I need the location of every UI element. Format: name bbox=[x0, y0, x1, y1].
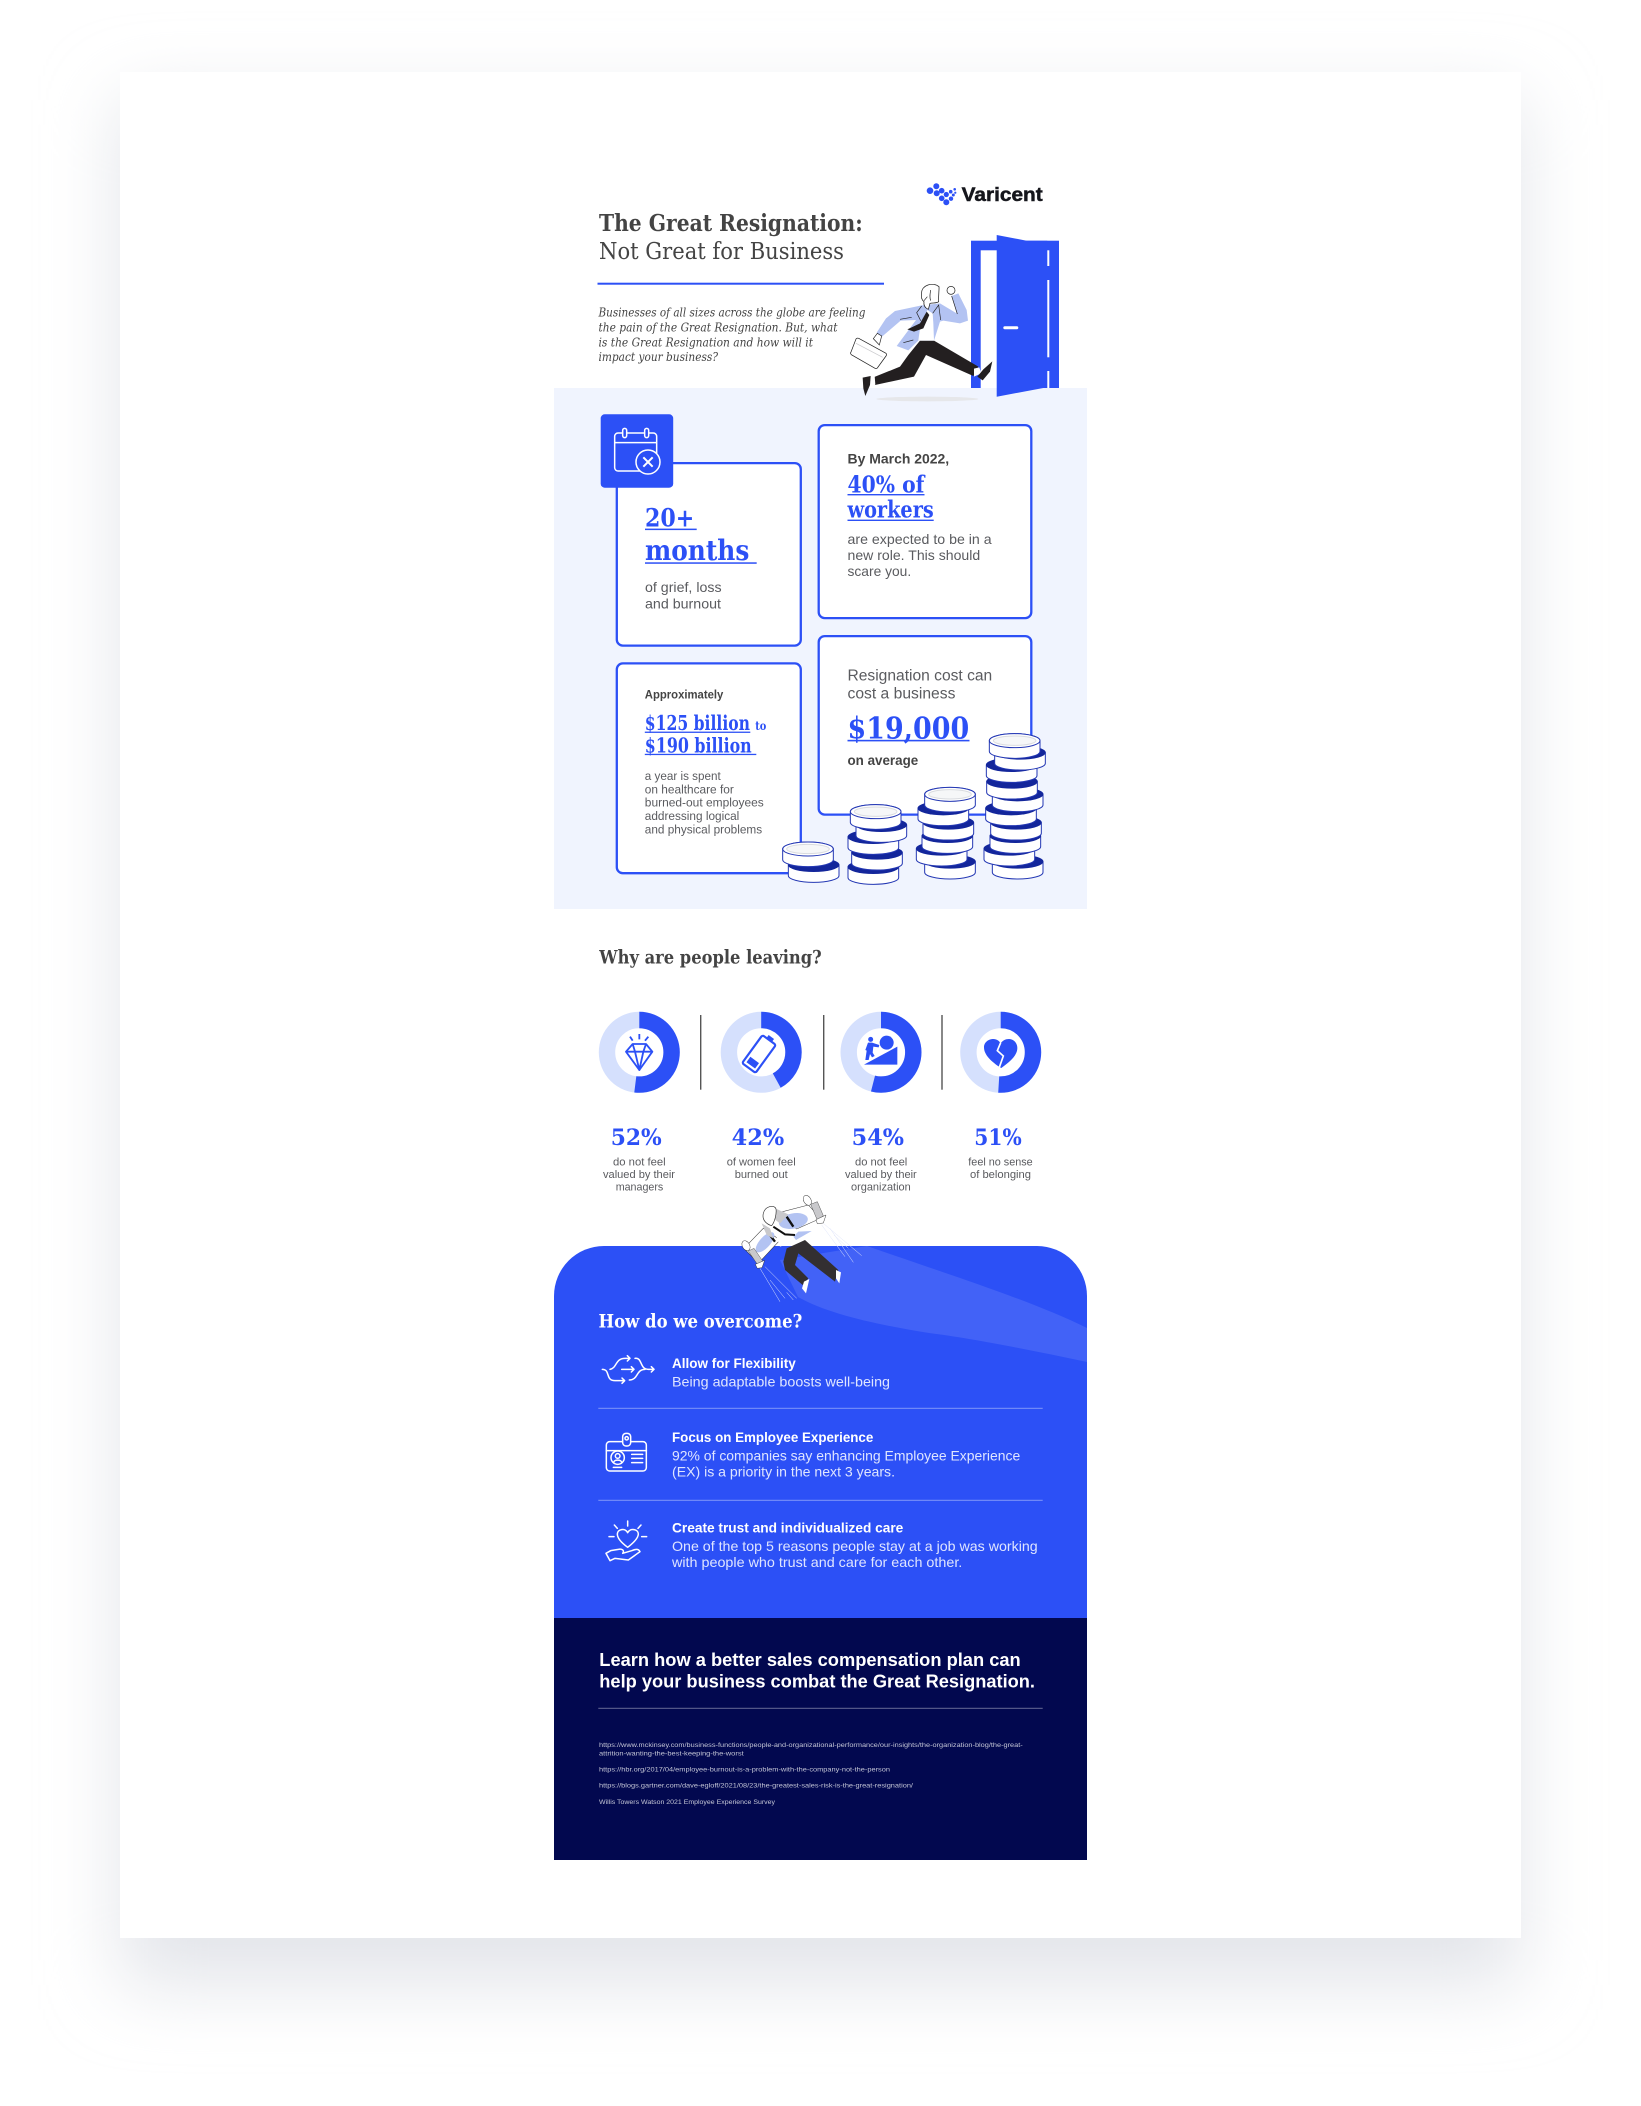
chart: 42 percent donut bbox=[729, 1020, 794, 1085]
panel: card 40% of workers: By March 2022, bbox=[848, 451, 949, 466]
panel: card 20+ months: 20+ bbox=[645, 504, 694, 532]
call to action text: Learn how a better sales compensation plan can bbox=[599, 1650, 1021, 1670]
icon: diamond bbox=[626, 1034, 652, 1070]
stat: 52 percent bbox=[603, 1125, 675, 1194]
panel: card healthcare cost bbox=[617, 663, 801, 873]
intro paragraph: is the Great Resignation and how will it bbox=[598, 334, 814, 349]
call to action text: help your business combat the Great Resignation. bbox=[599, 1672, 1035, 1692]
stat: 54 percent: do not feel bbox=[855, 1156, 907, 1168]
logo: Varicent: Varicent bbox=[962, 184, 1043, 206]
panel: card 40% of workers: are expected to be in a bbox=[848, 531, 992, 547]
panel: card resignation cost: cost a business bbox=[848, 685, 956, 702]
stat: 54 percent: valued by their bbox=[845, 1169, 917, 1181]
heading: why are people leaving: Why are people leaving? bbox=[598, 946, 822, 968]
chart: 51 percent donut bbox=[968, 1020, 1033, 1085]
stat: 51 percent bbox=[968, 1125, 1033, 1181]
panel: card resignation cost bbox=[819, 636, 1031, 815]
panel: card healthcare cost: burned-out employees bbox=[645, 796, 764, 810]
panel: card healthcare cost: to bbox=[755, 718, 766, 733]
icon: open door bbox=[971, 235, 1059, 397]
sources list: https://hbr.org/2017/04/employee-burnout-is-a-problem-with-the-company-not-the-person bbox=[599, 1767, 891, 1774]
icon: flexibility arrows bbox=[602, 1356, 654, 1383]
text: trust and care: with people who trust and care for each other. bbox=[671, 1555, 962, 1570]
panel: card 40% of workers: scare you. bbox=[848, 563, 911, 579]
sources list: attrition-wanting-the-best-keeping-the-worst bbox=[599, 1750, 744, 1757]
intro paragraph: Businesses of all sizes across the globe are feeling bbox=[598, 305, 865, 320]
stat: 42 percent: burned out bbox=[735, 1169, 789, 1181]
panel: card 40% of workers: new role. This should bbox=[848, 547, 980, 563]
heading: how do we overcome: How do we overcome? bbox=[598, 1310, 802, 1332]
panel: card resignation cost: $19,000 bbox=[848, 711, 969, 746]
panel: card healthcare cost: Approximately bbox=[645, 687, 724, 701]
paper sheet bbox=[120, 72, 1521, 1938]
illustration: man running out the door bbox=[851, 284, 992, 401]
intro paragraph: the pain of the Great Resignation. But, what bbox=[598, 320, 838, 335]
panel: card 20+ months: and burnout bbox=[645, 596, 721, 612]
stat: 42 percent: of women feel bbox=[727, 1156, 796, 1168]
panel: card healthcare cost: $190 billion bbox=[645, 733, 752, 757]
decorative light sweep behind flying man bbox=[780, 1246, 1087, 1362]
panel: card 20+ months: months bbox=[645, 534, 749, 567]
panel: statistics band bbox=[554, 388, 1087, 909]
intro paragraph bbox=[598, 305, 865, 364]
title: The Great Resignation: bbox=[599, 210, 863, 237]
panel: card resignation cost: Resignation cost can bbox=[848, 668, 992, 685]
sources list bbox=[599, 1742, 1023, 1806]
panel: call to action and sources bbox=[554, 1618, 1087, 1860]
logo: Varicent bbox=[927, 183, 1043, 206]
panel: card 20+ months bbox=[617, 463, 801, 646]
panel: how do we overcome bbox=[554, 1246, 1087, 1618]
illustration: coin stacks bbox=[783, 734, 1046, 884]
panel: card 40% of workers: workers bbox=[847, 496, 934, 523]
sources list: https://www.mckinsey.com/business-functions/people-and-organizational-performance/our-insights/the-organization-blog/the-great- bbox=[599, 1742, 1023, 1749]
stat: 52 percent: managers bbox=[616, 1182, 664, 1194]
panel: card 40% of workers: 40% of bbox=[848, 472, 926, 499]
stat: 54 percent: organization bbox=[851, 1182, 911, 1194]
text: allow for flexibility bbox=[672, 1356, 890, 1390]
stat: 54 percent bbox=[845, 1125, 917, 1194]
text: employee experience: Focus on Employee Experience bbox=[672, 1430, 873, 1445]
stat: 52 percent: valued by their bbox=[603, 1169, 675, 1181]
panel: card resignation cost: on average bbox=[848, 753, 919, 768]
panel: card healthcare cost: and physical problems bbox=[645, 822, 762, 836]
chart: 54 percent donut bbox=[849, 1020, 913, 1085]
text: trust and care: One of the top 5 reasons people stay at a job was working bbox=[672, 1539, 1038, 1554]
stat: 54 percent: 54% bbox=[852, 1125, 904, 1151]
icon: person pushing boulder uphill bbox=[864, 1036, 897, 1065]
text: employee experience: 92% of companies say enhancing Employee Experience bbox=[672, 1449, 1020, 1464]
illustration: man flying with jetpack bbox=[740, 1194, 862, 1302]
icon: calendar with cross bbox=[601, 414, 673, 488]
text: employee experience: (EX) is a priority in the next 3 years. bbox=[672, 1465, 895, 1480]
text: employee experience bbox=[672, 1430, 1020, 1480]
intro paragraph: impact your business? bbox=[598, 349, 718, 364]
call to action text bbox=[599, 1650, 1035, 1692]
panel: card healthcare cost: $125 billion bbox=[645, 711, 750, 735]
stat: 51 percent: feel no sense bbox=[968, 1156, 1033, 1168]
panel: card 20+ months: of grief, loss bbox=[645, 579, 722, 595]
stat: 42 percent bbox=[727, 1125, 796, 1181]
panel: card healthcare cost: addressing logical bbox=[645, 809, 739, 823]
stat: 51 percent: 51% bbox=[974, 1125, 1022, 1151]
panel: card 40% of workers bbox=[819, 425, 1031, 618]
stat: 52 percent: do not feel bbox=[613, 1156, 666, 1168]
icon: heart and hand bbox=[606, 1521, 647, 1561]
icon: low battery bbox=[742, 1032, 778, 1073]
sources list: https://blogs.gartner.com/dave-egloff/2021/08/23/the-greatest-sales-risk-is-the-great-resignation/ bbox=[599, 1783, 913, 1790]
title bbox=[599, 210, 863, 265]
icon: employee ID badge bbox=[606, 1433, 646, 1471]
stat: 42 percent: 42% bbox=[732, 1125, 784, 1151]
text: allow for flexibility: Being adaptable boosts well-being bbox=[672, 1375, 890, 1390]
panel: card healthcare cost: on healthcare for bbox=[645, 782, 734, 796]
panel: card healthcare cost: a year is spent bbox=[645, 769, 721, 783]
title: Not Great for Business bbox=[599, 238, 844, 265]
text: trust and care: Create trust and individualized care bbox=[672, 1520, 903, 1535]
sources list: Willis Towers Watson 2021 Employee Experience Survey bbox=[599, 1799, 776, 1806]
stat: 51 percent: of belonging bbox=[970, 1169, 1031, 1181]
text: allow for flexibility: Allow for Flexibility bbox=[672, 1356, 796, 1371]
icon: broken heart bbox=[984, 1039, 1017, 1068]
text: trust and care bbox=[671, 1520, 1038, 1570]
stat: 52 percent: 52% bbox=[611, 1125, 662, 1151]
chart: 52 percent donut bbox=[607, 1020, 672, 1085]
